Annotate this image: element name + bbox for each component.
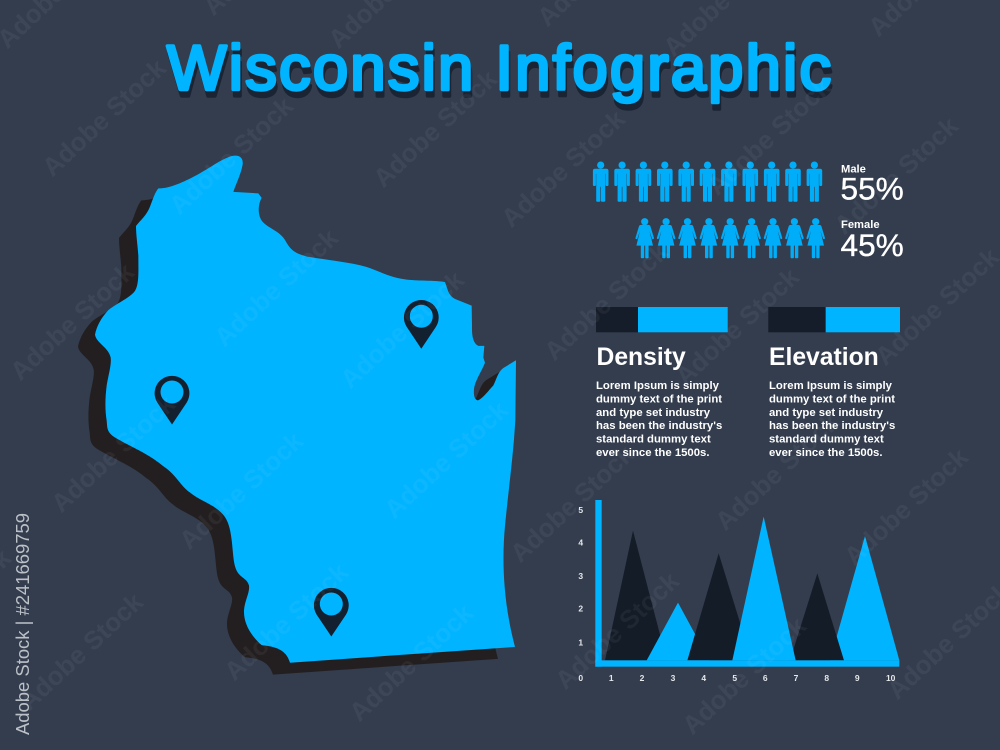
stock watermark pattern: Adobe Stock [670, 263, 805, 391]
chart axis labels: 9 [855, 673, 860, 683]
stock watermark pattern: Adobe Stock [344, 599, 479, 727]
map: Wisconsin [78, 156, 516, 675]
stock watermark pattern: Adobe Stock [37, 54, 172, 182]
chart axis labels: 5 [578, 505, 583, 515]
stock watermark pattern: Adobe Stock [702, 73, 837, 201]
chart axis labels: 3 [671, 673, 676, 683]
chart axis labels: 3 [578, 571, 583, 581]
elevation text [769, 380, 895, 459]
map pin: west [155, 376, 189, 424]
stock watermark pattern: Adobe Stock [164, 92, 299, 220]
stock watermark pattern: Adobe Stock [505, 440, 640, 568]
male label: 55% [840, 170, 904, 206]
chart axis labels [578, 505, 896, 683]
chart axis labels: 8 [824, 673, 829, 683]
chart axis labels: 4 [701, 673, 706, 683]
female label: 45% [840, 227, 904, 263]
map pin: north east [404, 300, 439, 349]
chart axis labels: 10 [886, 673, 896, 683]
stock watermark pattern: Adobe Stock [496, 105, 631, 233]
chart axis labels: 1 [609, 673, 614, 683]
map pin: south [314, 588, 349, 636]
stock watermark pattern: Adobe Stock [677, 612, 812, 740]
panel: density [596, 307, 728, 459]
triangle chart [578, 500, 899, 683]
stock watermark pattern: Adobe Stock [539, 238, 674, 366]
female population icons [635, 218, 825, 258]
chart axis labels: 5 [732, 673, 737, 683]
map shadow [78, 168, 499, 675]
chart axis labels: 7 [794, 673, 799, 683]
female label: Female [841, 219, 880, 231]
elevation text: dummy text of the print [769, 393, 895, 405]
title: Wisconsin Infographic [168, 40, 832, 110]
stock watermark pattern: Adobe Stock [379, 396, 514, 524]
stock watermark pattern: Adobe Stock [14, 588, 149, 716]
elevation text: Lorem Ipsum is simply [769, 380, 893, 392]
elevation bar [768, 307, 900, 332]
density text: standard dummy text [596, 434, 711, 446]
density text: has been the industry's [596, 420, 722, 432]
stock watermark pattern: Adobe Stock [550, 567, 685, 695]
chart axis labels: 2 [578, 604, 583, 614]
density text: ever since the 1500s. [596, 447, 710, 459]
density heading: Density [596, 344, 686, 371]
stock id label: Adobe Stock | #241669759 [12, 513, 33, 735]
chart axis labels: 2 [640, 673, 645, 683]
stock watermark pattern: Adobe Stock [46, 390, 181, 518]
panel: elevation [768, 307, 900, 459]
density text: Lorem Ipsum is simply [596, 380, 720, 392]
male label: Male [841, 163, 866, 175]
chart axis labels: 6 [763, 673, 768, 683]
stock watermark pattern: Adobe Stock [335, 266, 470, 394]
title: Wisconsin Infographic [167, 34, 831, 104]
density bar [596, 307, 728, 332]
elevation heading: Elevation [769, 344, 879, 371]
map shape [95, 156, 516, 663]
stock watermark pattern: Adobe Stock [829, 112, 964, 240]
stock watermark pattern: Adobe Stock [368, 65, 503, 193]
male population icons [593, 162, 822, 202]
stock watermark pattern: Adobe Stock [174, 427, 309, 555]
elevation text: has been the industry's [769, 420, 895, 432]
elevation text: and type set industry [769, 407, 884, 419]
stock watermark pattern: Adobe Stock [209, 224, 344, 352]
density text: dummy text of the print [596, 393, 722, 405]
chart axis labels: 1 [578, 637, 583, 647]
density text [596, 380, 722, 459]
density text: and type set industry [596, 407, 711, 419]
elevation text: standard dummy text [769, 434, 884, 446]
chart axis labels: 4 [578, 538, 583, 548]
stock watermark pattern: Adobe Stock [5, 258, 140, 386]
chart axis labels: 0 [578, 673, 583, 683]
stock watermark pattern: Adobe Stock [839, 443, 974, 571]
stock watermark pattern: Adobe Stock [219, 558, 354, 686]
elevation text: ever since the 1500s. [769, 447, 883, 459]
stock watermark pattern: Adobe Stock [710, 408, 845, 536]
